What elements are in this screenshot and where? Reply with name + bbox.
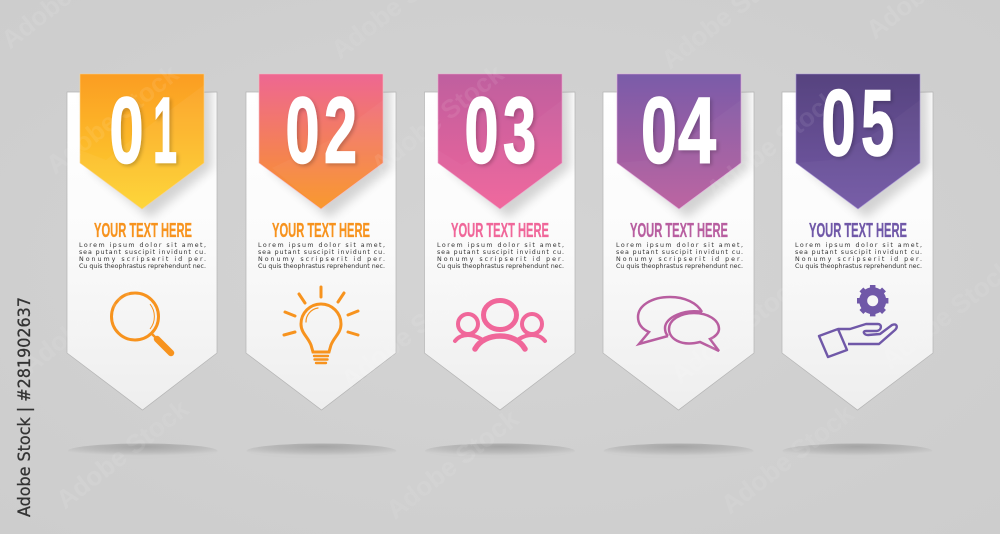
icon: people xyxy=(455,300,545,349)
text block 03 xyxy=(437,242,564,270)
heading 04: YOUR TEXT HERE xyxy=(630,220,728,242)
ribbon 04 xyxy=(617,74,741,209)
text block 01: Cu quis theophrastus reprehendunt nec. xyxy=(79,263,206,270)
watermark: Adobe Stock xyxy=(335,273,479,395)
text block 04: Nonumy scripserit id per. xyxy=(616,256,743,263)
ribbon 05 xyxy=(796,74,920,209)
text block 02: Lorem ipsum dolor sit amet, xyxy=(258,242,385,249)
ribbon 02 xyxy=(259,74,383,209)
icon: light bulb xyxy=(284,287,358,363)
text block 03: sea putant suscipit invidunt cu. xyxy=(437,249,564,256)
panel: step 04 xyxy=(603,74,754,410)
ribbon 01 xyxy=(80,74,204,209)
panel: step 01 xyxy=(67,74,217,410)
watermark: Adobe Stock xyxy=(715,398,859,520)
card body 05 xyxy=(782,92,933,410)
number 02: 2 xyxy=(324,78,357,182)
number 03: 3 xyxy=(503,78,536,182)
text block 03: Lorem ipsum dolor sit amet, xyxy=(437,242,564,249)
number 05: 0 xyxy=(822,70,856,175)
text block 01: Lorem ipsum dolor sit amet, xyxy=(79,242,206,249)
ribbon 03 xyxy=(438,74,562,209)
number 01: 0 xyxy=(110,78,144,182)
text block 05: Lorem ipsum dolor sit amet, xyxy=(795,242,922,249)
floor shadow 1 xyxy=(68,444,218,458)
watermark: Adobe Stock xyxy=(15,258,159,380)
heading 01: YOUR TEXT HERE xyxy=(94,220,192,242)
card body 04 xyxy=(603,92,754,410)
card body 03 xyxy=(424,92,575,410)
watermark: Adobe Stock xyxy=(380,403,524,525)
panel: step 05 xyxy=(782,70,933,410)
watermark: Adobe Stock xyxy=(665,268,809,390)
number 04: 0 xyxy=(641,78,677,182)
floor shadow 5 xyxy=(782,444,932,458)
icon: magnifier xyxy=(112,293,171,353)
number 05: 5 xyxy=(861,70,894,175)
text block 05: Cu quis theophrastus reprehendunt nec. xyxy=(795,263,922,270)
text block 02: Cu quis theophrastus reprehendunt nec. xyxy=(258,263,385,270)
text block 04: Lorem ipsum dolor sit amet, xyxy=(616,242,743,249)
text block 05: sea putant suscipit invidunt cu. xyxy=(795,249,922,256)
icon: hand with gear xyxy=(819,285,897,357)
heading 02: YOUR TEXT HERE xyxy=(272,220,370,242)
heading 03: YOUR TEXT HERE xyxy=(451,220,549,242)
text block 02: sea putant suscipit invidunt cu. xyxy=(258,249,385,256)
heading 05: YOUR TEXT HERE xyxy=(809,220,907,242)
number 02: 0 xyxy=(286,78,320,182)
text block 01 xyxy=(79,242,206,270)
number 03: 0 xyxy=(464,78,498,182)
panel: step 02 xyxy=(246,74,396,410)
panel: step 03 xyxy=(424,74,575,410)
number 04: 4 xyxy=(678,78,716,182)
floor shadow 3 xyxy=(425,444,575,458)
panel: step 01: 1 xyxy=(153,78,177,182)
watermark: Adobe Stock xyxy=(50,393,194,515)
text block 01: Nonumy scripserit id per. xyxy=(79,256,206,263)
text block 04: Cu quis theophrastus reprehendunt nec. xyxy=(616,263,743,270)
text block 01: sea putant suscipit invidunt cu. xyxy=(79,249,206,256)
text block 03: Cu quis theophrastus reprehendunt nec. xyxy=(437,263,564,270)
text block 05 xyxy=(795,242,922,270)
card body 02 xyxy=(246,92,396,410)
floor shadow 2 xyxy=(246,444,396,458)
text block 04 xyxy=(616,242,743,270)
watermark: Adobe Stock xyxy=(700,83,844,205)
text block 02: Nonumy scripserit id per. xyxy=(258,256,385,263)
number 04 xyxy=(641,78,716,182)
text block 03: Nonumy scripserit id per. xyxy=(437,256,564,263)
stock id label: Adobe Stock | #281902637 xyxy=(15,297,35,517)
icon: speech bubbles xyxy=(638,297,719,351)
watermark: Adobe Stock xyxy=(365,58,509,180)
floor shadow 4 xyxy=(604,444,754,458)
card body 01 xyxy=(67,92,217,410)
watermark: Adobe Stock xyxy=(40,58,184,180)
text block 02 xyxy=(258,242,385,270)
text block 04: sea putant suscipit invidunt cu. xyxy=(616,249,743,256)
text block 05: Nonumy scripserit id per. xyxy=(795,256,922,263)
